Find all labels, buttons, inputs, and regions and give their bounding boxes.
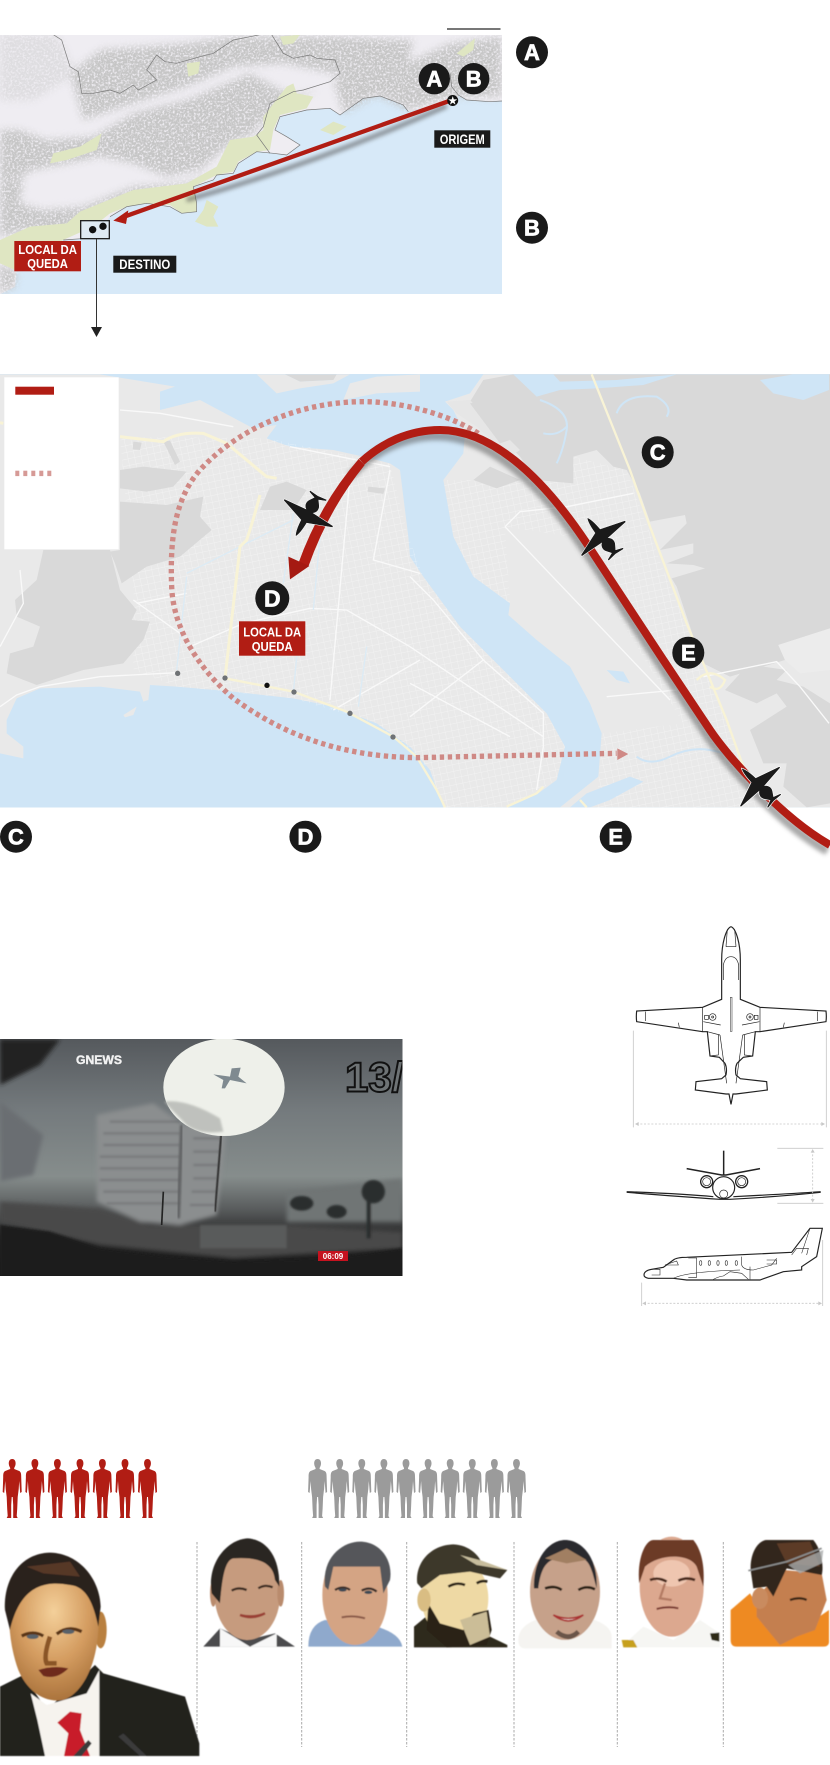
- badge: E text column: E: [608, 824, 623, 850]
- icon: plane along route: [565, 500, 638, 572]
- land: [0, 35, 502, 294]
- timestamp: [318, 1251, 348, 1261]
- label: local da queda: [14, 241, 81, 271]
- panel: legend: [4, 377, 119, 549]
- icon: plane at route start: [722, 748, 795, 821]
- dimension: length: [642, 1240, 823, 1306]
- dimension: height: [777, 1148, 823, 1203]
- label: local da queda on detail map: QUEDA: [252, 639, 293, 654]
- marker: origin star: ★: [448, 96, 457, 107]
- diagram: aircraft top view: [636, 927, 826, 1104]
- highlight circle: [163, 1039, 285, 1136]
- badge: E on map: [672, 637, 704, 669]
- portrait: passenger 1: [203, 1538, 295, 1647]
- west roads: [0, 410, 420, 710]
- west land: mainland and peninsula: [0, 374, 565, 807]
- arrow: flight route on overview map: [113, 101, 450, 224]
- mottled relief: [0, 35, 502, 294]
- badge: D text column: [289, 821, 321, 853]
- badge: C text column: C: [8, 824, 24, 850]
- portrait: passenger 2: [308, 1542, 402, 1647]
- badge: B on map: B: [466, 66, 482, 92]
- divider rule above overview map: [447, 28, 500, 30]
- portrait: passenger in orange shirt: [731, 1540, 829, 1647]
- portrait: pilot in uniform: [622, 1537, 720, 1647]
- panel: overview map of the route: [0, 35, 502, 295]
- arrow: actual flight path: [288, 430, 830, 851]
- east roads: [410, 493, 829, 790]
- badge: A on map: A: [426, 66, 442, 92]
- badge: B text block marker: [516, 212, 548, 244]
- icon: plane over crash site: [271, 481, 343, 550]
- arrow: pointer to detail map: [91, 239, 102, 337]
- dotted alternative route: [171, 402, 617, 758]
- label: local da queda on detail map: LOCAL DA: [243, 625, 302, 640]
- badge: B text block marker: B: [524, 216, 540, 240]
- badge: A text block marker: [516, 36, 548, 68]
- badge: A on map: [419, 63, 450, 94]
- portrait: cameraman with cap and beard: [414, 1544, 507, 1647]
- badge: C text column: [0, 821, 32, 853]
- green coastal lowlands: [0, 35, 475, 270]
- state borders and coast: [53, 35, 502, 240]
- north shore land: [257, 374, 350, 393]
- badge: B on map: [458, 63, 489, 94]
- badge: E text column: [600, 821, 632, 853]
- badge: D on map: D: [264, 586, 281, 612]
- portrait: main candidate in suit: [0, 1553, 199, 1756]
- photo: video frame of the falling plane: [0, 1039, 427, 1276]
- marker: crash site inset box: [81, 221, 109, 239]
- badge: D text column: D: [297, 824, 313, 850]
- panel: detail map of Santos and Guarujá: [0, 370, 830, 810]
- label: local da queda on detail map: [239, 621, 305, 656]
- icon row: ten gray people: [308, 1459, 526, 1518]
- label: local da queda: LOCAL DA: [18, 242, 77, 257]
- label: destino: DESTINO: [119, 257, 170, 272]
- dimension: wingspan: [633, 1031, 826, 1127]
- diagram: aircraft front view: [627, 1151, 821, 1199]
- forest, east: [470, 374, 830, 807]
- broadcaster logo: GNEWS: [76, 1053, 122, 1067]
- date stamp: 13/0: [345, 1054, 427, 1100]
- label: origem: ORIGEM: [440, 132, 485, 147]
- badge: A text block marker: A: [524, 40, 540, 65]
- badge: E on map: E: [681, 640, 696, 666]
- icon row: seven red people: [3, 1459, 157, 1518]
- label: local da queda: QUEDA: [27, 256, 68, 271]
- beach markers: [175, 671, 396, 740]
- badge: C on map: [642, 436, 674, 468]
- portrait: passenger 4: [518, 1540, 612, 1648]
- diagram: aircraft side view: [644, 1228, 822, 1280]
- forested hills, west: [7, 374, 350, 685]
- badge: C on map: C: [650, 440, 666, 465]
- tidal channels: [540, 396, 737, 763]
- dark foreground: [0, 1224, 402, 1254]
- timestamp: 06:09: [323, 1252, 344, 1261]
- east land: [443, 374, 830, 807]
- badge: D on map: [255, 581, 289, 615]
